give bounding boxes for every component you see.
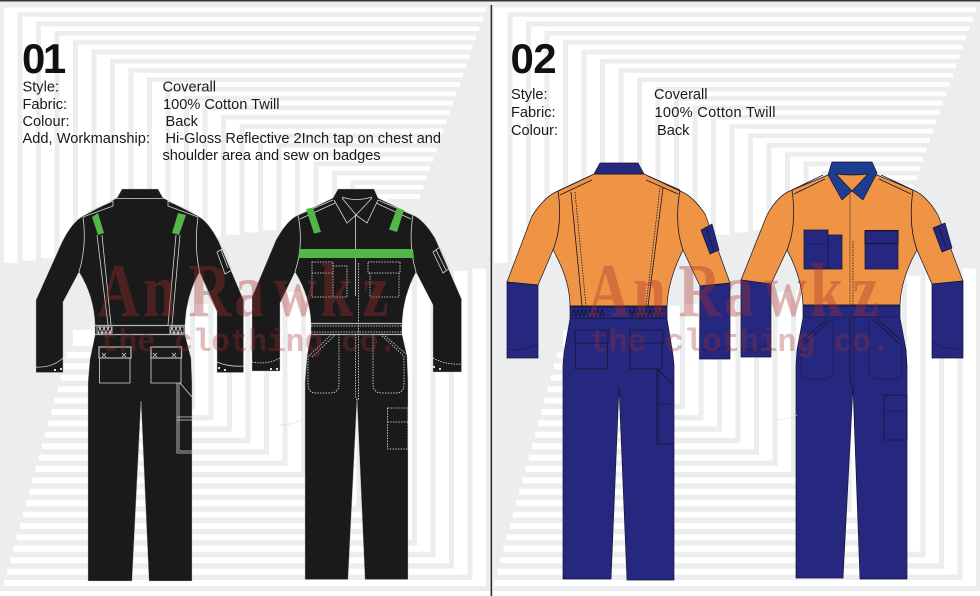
waist elastic <box>570 307 667 318</box>
side leg pocket <box>657 369 674 444</box>
waist belt, front <box>311 324 402 334</box>
shoulder reflective tape, back <box>92 213 186 235</box>
coverall 01 front view, black <box>252 189 462 580</box>
spec labels 01: Add, Workmanship: <box>22 131 150 147</box>
upper body, orange <box>507 174 730 306</box>
spec labels 02: Fabric: <box>511 105 556 121</box>
spec labels 02: Style: <box>511 87 548 103</box>
top edge line <box>0 0 980 2</box>
background pattern: right panel <box>490 1 980 591</box>
side leg pocket, front <box>388 408 408 449</box>
spec values 01: Hi-Gloss Reflective 2Inch tap on chest and <box>166 131 441 147</box>
upper body, orange <box>741 175 963 305</box>
yoke and back seams <box>553 176 683 306</box>
coverall 02 front view, orange and navy <box>741 162 963 579</box>
legs, navy <box>796 305 907 579</box>
panel: style 01 specification <box>22 35 441 164</box>
watermark, left panel: the clothing co. <box>100 324 397 361</box>
neck inset <box>836 174 868 191</box>
spec values 01: shoulder area and sew on badges <box>162 148 380 164</box>
spec values 02 <box>654 87 776 139</box>
back collar <box>594 163 644 174</box>
waist belt <box>803 306 900 317</box>
spec values 01: Coverall <box>162 80 216 96</box>
heading: 02: 02 <box>510 35 556 82</box>
cuffs <box>507 282 730 359</box>
spec values 01: Back <box>166 114 199 130</box>
spec labels 01 <box>22 80 150 147</box>
arm patch <box>933 223 952 252</box>
back pockets <box>99 347 182 383</box>
chest and shoulder reflective tape <box>298 208 414 258</box>
watermark, right panel: AnRawkz <box>587 248 879 333</box>
legs, navy <box>563 306 674 580</box>
back pockets <box>575 330 663 369</box>
collar and placket seams <box>295 197 450 296</box>
white gutter beside divider <box>492 2 493 596</box>
watermark, left panel: AnRawkz <box>97 248 389 333</box>
spec labels 01: Colour: <box>22 114 70 130</box>
waist belt, back <box>95 326 185 334</box>
coverall 01 back view, black <box>36 189 244 581</box>
cuff stitching and buttons, front <box>252 358 461 370</box>
arm patch <box>701 224 719 254</box>
collar <box>828 162 877 200</box>
cuff buttons, back <box>54 367 226 371</box>
panel: style 02 specification <box>510 35 776 139</box>
side pocket stitching <box>657 372 674 442</box>
side leg pocket, back <box>177 383 192 453</box>
spec labels 01: Fabric: <box>22 97 67 113</box>
centre divider <box>491 5 492 596</box>
chest pockets <box>804 230 898 269</box>
cuff stitching <box>741 342 963 349</box>
yoke and placket seams <box>787 175 917 305</box>
spec values 01: 100% Cotton Twill <box>163 97 280 113</box>
stray stitch marks, right panel <box>675 415 797 420</box>
stray stitch mark, left panel <box>280 419 303 425</box>
hip pockets and centre seam <box>801 318 902 386</box>
spec labels 02 <box>511 87 558 139</box>
cuffs <box>741 280 963 358</box>
coverall 02 back view, orange and navy <box>507 163 730 580</box>
side leg pocket <box>884 395 907 440</box>
spec values 02: 100% Cotton Twill <box>654 105 776 121</box>
hip pockets, front <box>308 334 406 400</box>
cuff stitching <box>507 344 730 350</box>
chest pockets, front <box>312 262 400 400</box>
heading: 01: 01 <box>22 35 66 82</box>
spec labels 01: Style: <box>22 80 59 96</box>
spec labels 02: Colour: <box>511 123 558 139</box>
spec values 01 <box>162 80 441 164</box>
background pattern: left panel <box>0 1 490 591</box>
watermark, right panel: the clothing co. <box>590 324 890 361</box>
spec values 02: Back <box>657 123 690 139</box>
spec values 02: Coverall <box>654 87 708 103</box>
yoke, collar and sleeve seams <box>36 198 244 367</box>
